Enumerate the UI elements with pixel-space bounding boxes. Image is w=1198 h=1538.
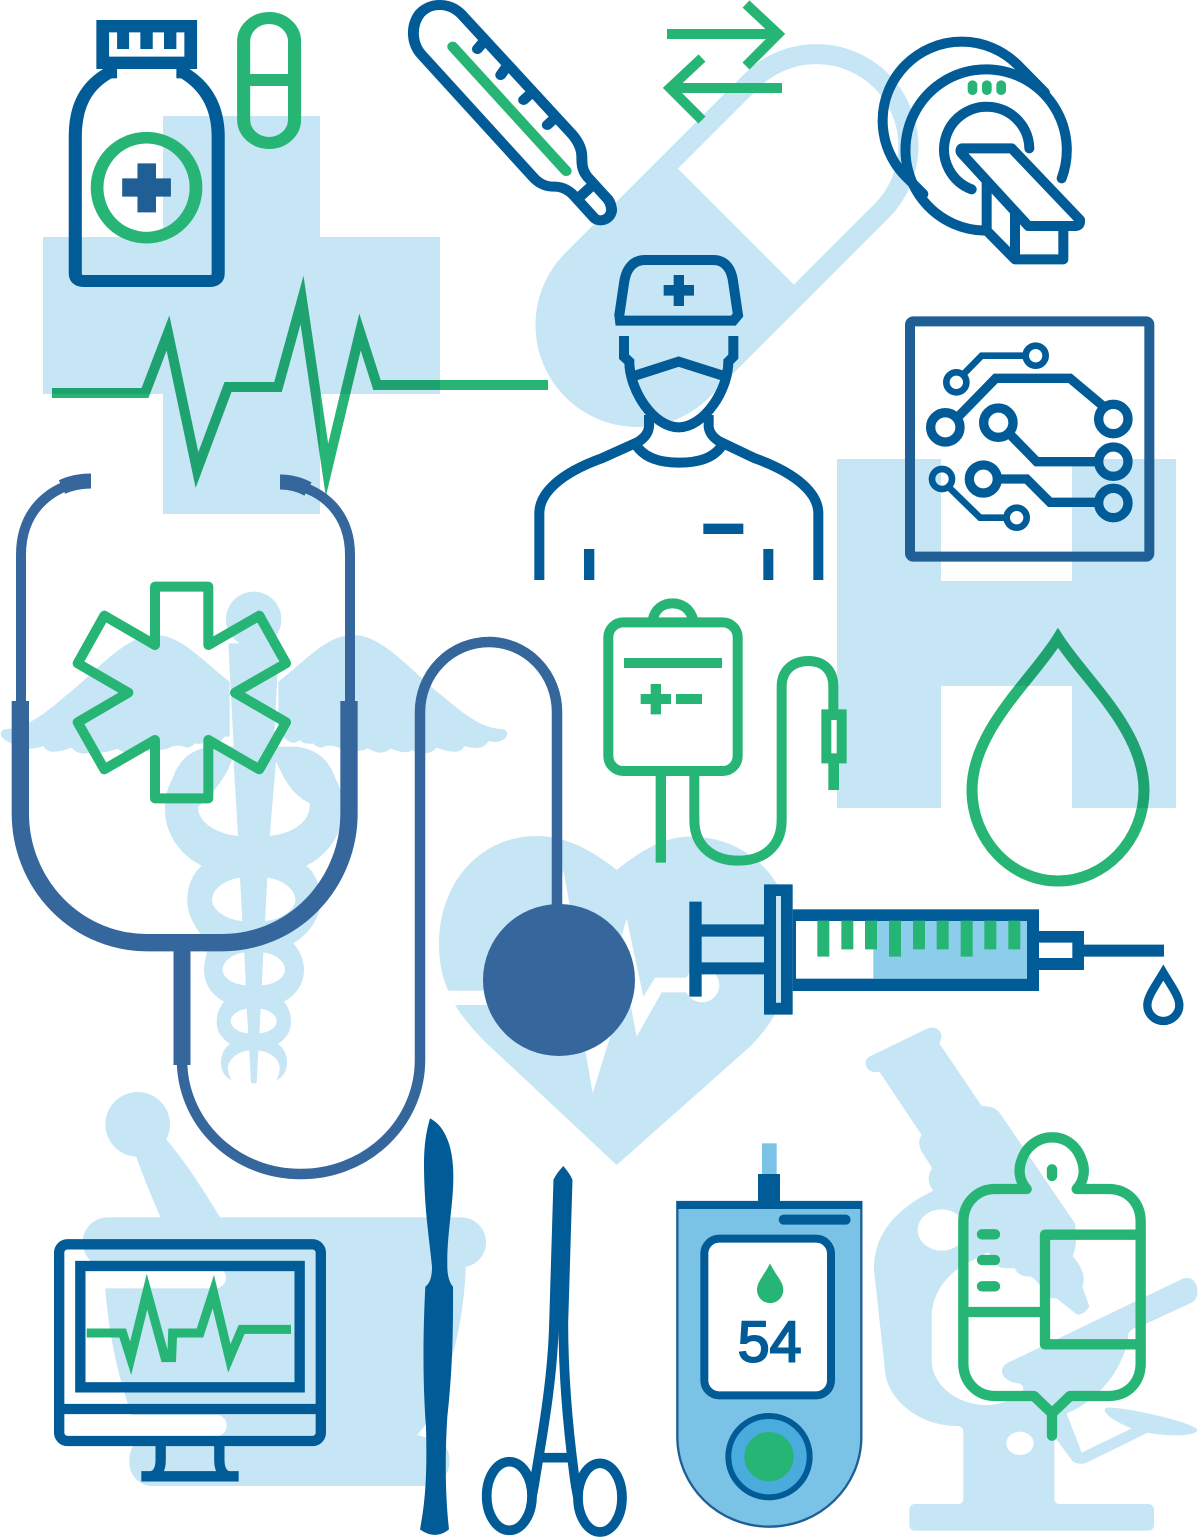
background medical cross (43, 116, 440, 514)
plus sign (122, 163, 171, 212)
falling drop (1147, 973, 1179, 1021)
tube (182, 642, 557, 1174)
test strip (762, 1143, 777, 1175)
headset U (20, 701, 349, 943)
green ring (97, 138, 196, 238)
barrel (793, 909, 1039, 991)
background microscope (866, 1028, 1197, 1531)
line: heartbeat trace (52, 300, 548, 470)
icon: capsule pill (244, 18, 295, 143)
icon: surgeon (539, 260, 818, 580)
meter body (677, 1202, 861, 1527)
glucose reading: 54 (738, 1311, 802, 1375)
icon: circuit board (910, 321, 1149, 557)
plunger (689, 902, 764, 997)
background mortar and pestle (60, 1092, 486, 1486)
icon: blood bag (963, 1137, 1141, 1436)
icon: surgical forceps (487, 1166, 622, 1532)
meter button (728, 1416, 810, 1497)
ear tubes (21, 483, 350, 705)
neck and shoulders (635, 415, 723, 444)
icon: scalpel (420, 1118, 453, 1535)
monitor heartbeat (87, 1292, 291, 1358)
surgical cap (619, 260, 738, 321)
drop icon (757, 1263, 783, 1303)
icon: IV drip bag (608, 603, 847, 863)
flange (764, 884, 793, 1015)
icon: patient monitor (59, 1244, 321, 1476)
display (704, 1239, 831, 1395)
icon: syringe (689, 884, 1179, 1021)
icon: star of life (78, 587, 286, 798)
stem (174, 950, 190, 1065)
nozzle and needle (1039, 931, 1164, 970)
icon: medicine bottle (75, 20, 218, 281)
bottle cap (96, 20, 197, 69)
icon: thermometer (413, 5, 612, 220)
icon: exchange arrows (667, 4, 782, 120)
background capsule (493, 9, 954, 469)
background caduceus (1, 592, 507, 1084)
tick marks (817, 921, 1020, 957)
icon: glucose meter (677, 1143, 862, 1527)
background heart with pulse (439, 836, 793, 1165)
face and mask (624, 336, 733, 427)
background hospital H (837, 459, 1176, 808)
chest piece (483, 904, 635, 1056)
icon: MRI scanner (883, 42, 1080, 259)
icon: large blood drop (972, 638, 1144, 881)
icon: stethoscope (20, 481, 635, 1174)
